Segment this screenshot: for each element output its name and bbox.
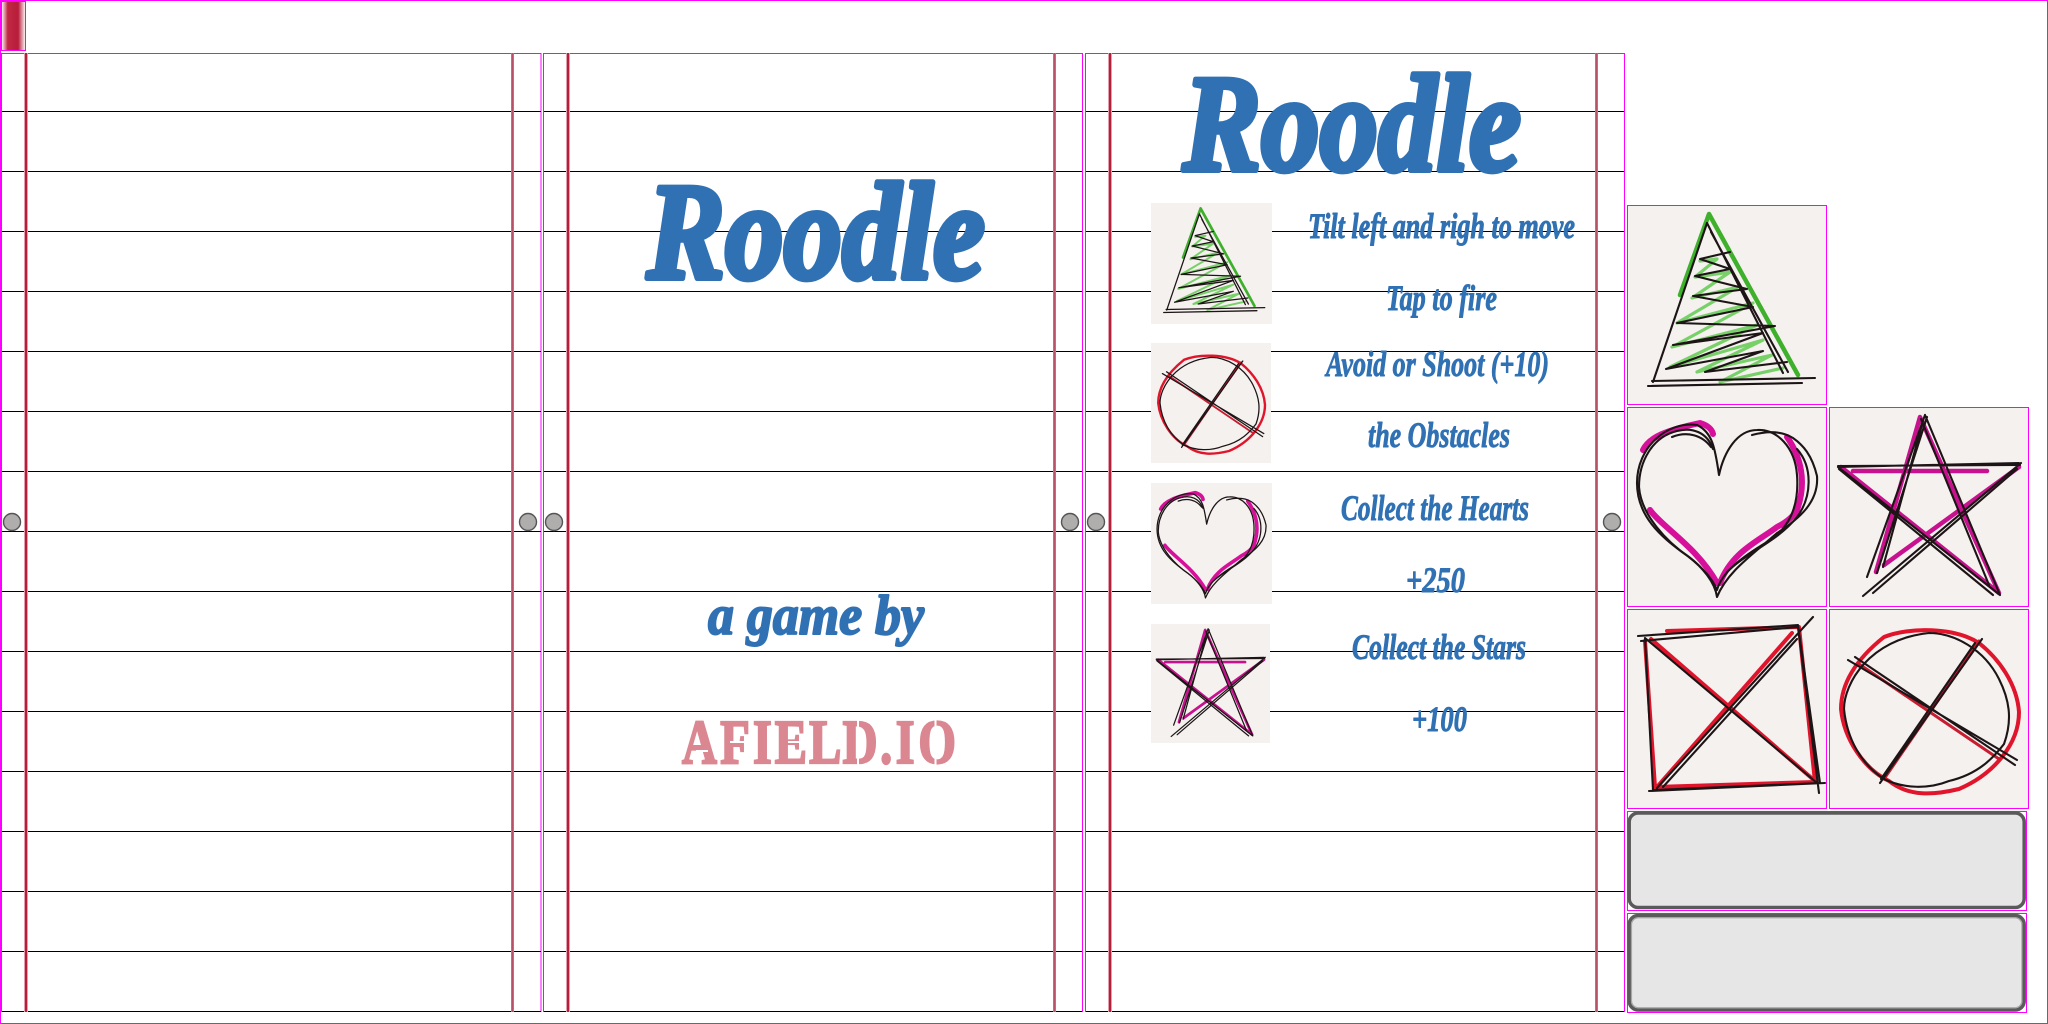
panel: blank notebook page <box>2 53 541 1012</box>
icon: heart <box>1151 483 1272 604</box>
studio name: AFIELD.IO <box>682 708 956 777</box>
icon: circle obstacle <box>1151 343 1271 463</box>
button: pressed state <box>1628 914 2026 1012</box>
icon: star <box>1151 624 1270 743</box>
panel: title page <box>544 53 1082 1012</box>
sprite: crossed circle <box>1829 609 2029 809</box>
title: Roodle <box>646 155 985 308</box>
sprite: star <box>1829 407 2029 607</box>
instruction: stars: Collect the Stars <box>1352 627 1526 667</box>
instruction: obstacles second line: the Obstacles <box>1368 415 1510 455</box>
instruction: hearts: Collect the Hearts <box>1341 488 1529 528</box>
sprite: heart <box>1627 407 1827 607</box>
icon: tree player <box>1151 203 1272 324</box>
score: hearts: +250 <box>1406 560 1465 600</box>
sprite: crossed square <box>1627 609 1827 809</box>
sprite: tree <box>1627 205 1827 405</box>
instruction: move: Tilt left and righ to move <box>1308 206 1575 246</box>
instruction: obstacles: Avoid or Shoot (+10) <box>1325 344 1549 384</box>
instruction: fire: Tap to fire <box>1386 278 1497 318</box>
panel: instructions page <box>1086 47 1624 1012</box>
byline: a game by <box>708 585 925 647</box>
red margin sprite <box>2 2 26 50</box>
score: stars: +100 <box>1412 699 1467 739</box>
button: normal state <box>1628 812 2026 910</box>
title: Roodle <box>1182 47 1521 200</box>
